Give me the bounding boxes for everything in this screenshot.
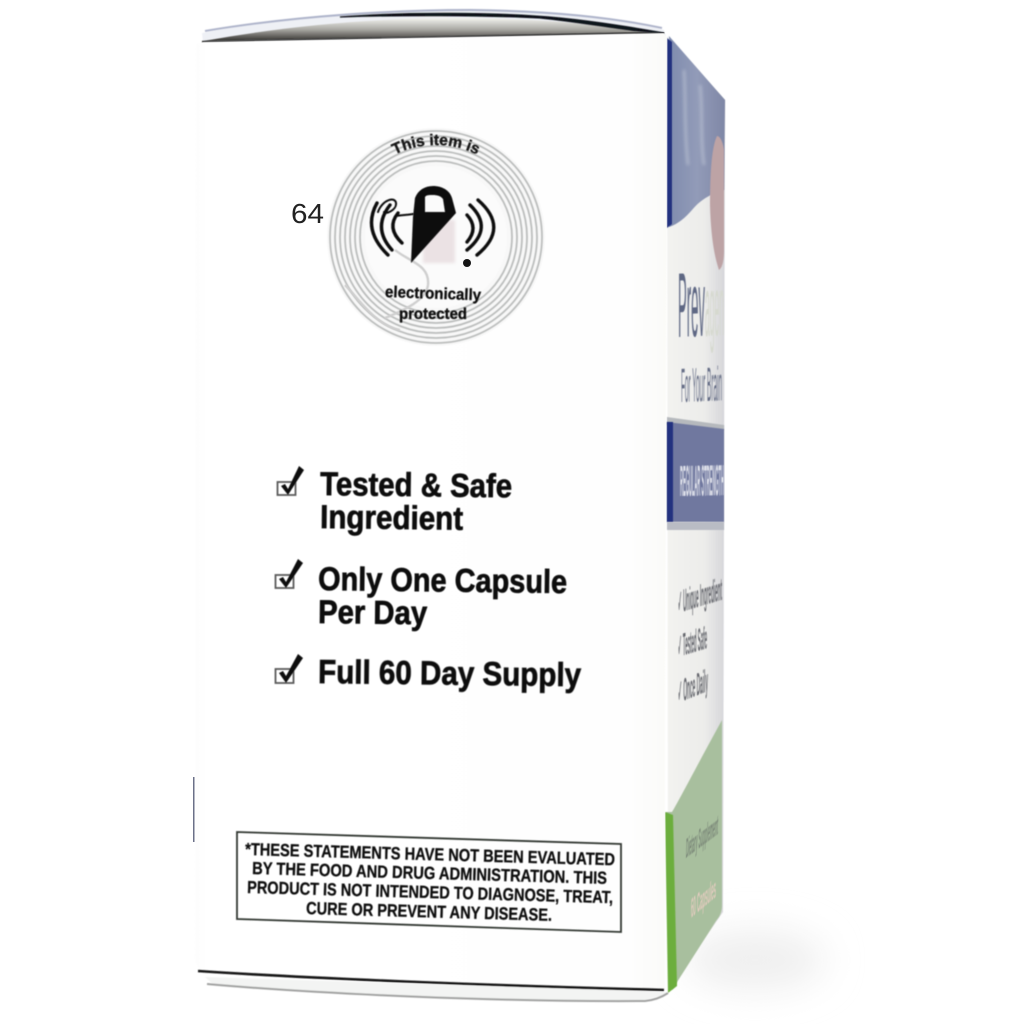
disclaimer box bbox=[237, 832, 621, 932]
seal swirl bbox=[345, 250, 428, 330]
seal inner area bbox=[365, 166, 507, 308]
benefit text 3: Full 60 Day Supply bbox=[318, 653, 582, 693]
text: ✓ Once Daily bbox=[678, 663, 708, 711]
green edge stripe bbox=[665, 812, 677, 993]
signal waves bbox=[372, 200, 494, 255]
benefit text 2: Per Day bbox=[318, 593, 428, 631]
disclaimer text: CURE OR PREVENT ANY DISEASE. bbox=[306, 898, 552, 925]
benefit text 1: Tested & Safe bbox=[320, 465, 512, 504]
benefit text 2: Only One Capsule bbox=[318, 560, 567, 600]
side benefit list bbox=[678, 570, 722, 711]
benefit text 1: Ingredient bbox=[320, 498, 463, 537]
box: front face bbox=[195, 33, 667, 990]
text: Dietary Supplement bbox=[686, 808, 718, 864]
benefit 1 bbox=[278, 465, 512, 537]
floor shadow bbox=[685, 930, 825, 990]
pale label patch bbox=[423, 220, 455, 263]
box: side panel bbox=[665, 36, 725, 993]
disclaimer text: PRODUCT IS NOT INTENDED TO DIAGNOSE, TREAT, bbox=[247, 877, 613, 907]
signal dot bbox=[463, 259, 471, 267]
text: ✓ Tested Safe bbox=[678, 619, 707, 664]
blue header with wave bbox=[669, 36, 725, 227]
text: agen bbox=[705, 259, 724, 354]
seal bottom text: electronically bbox=[385, 284, 481, 304]
seal top text: This item is bbox=[390, 132, 480, 154]
blue header streaks bbox=[684, 70, 704, 165]
benefit list bbox=[276, 465, 582, 693]
side panel base bbox=[667, 36, 725, 992]
seal bottom text: protected bbox=[399, 306, 467, 323]
seal rings bbox=[330, 131, 542, 343]
text: For Your Brain bbox=[681, 358, 722, 413]
product name bbox=[678, 253, 724, 357]
benefit text 2 bbox=[318, 560, 567, 631]
seal disc bbox=[327, 128, 545, 346]
benefit 2 bbox=[276, 559, 567, 631]
check icon 2 bbox=[276, 559, 303, 588]
disclaimer text: BY THE FOOD AND DRUG ADMINISTRATION. THIS bbox=[252, 858, 607, 888]
text: 60 Capsules bbox=[691, 871, 716, 924]
box: bottom flap bbox=[198, 971, 668, 1001]
pink seal bbox=[710, 136, 724, 270]
disclaimer text bbox=[245, 839, 615, 925]
navy strength band bbox=[667, 417, 724, 530]
security seal bbox=[291, 129, 544, 345]
disclaimer text: *THESE STATEMENTS HAVE NOT BEEN EVALUATED bbox=[245, 839, 615, 869]
benefit text 1 bbox=[320, 465, 512, 537]
seal bottom text bbox=[385, 284, 481, 323]
partial number: 64 bbox=[291, 198, 324, 229]
lock icon bbox=[411, 186, 456, 263]
navy edge stripe bbox=[667, 38, 672, 228]
benefit 3 bbox=[276, 653, 582, 693]
check icon 1 bbox=[278, 466, 304, 495]
edge mark bbox=[193, 777, 194, 842]
box: top flap bbox=[202, 9, 666, 42]
check icon 3 bbox=[276, 654, 303, 683]
green footer bbox=[666, 720, 722, 990]
text: ✓ Unique Ingredient bbox=[678, 570, 722, 620]
text: Prev bbox=[678, 253, 705, 357]
